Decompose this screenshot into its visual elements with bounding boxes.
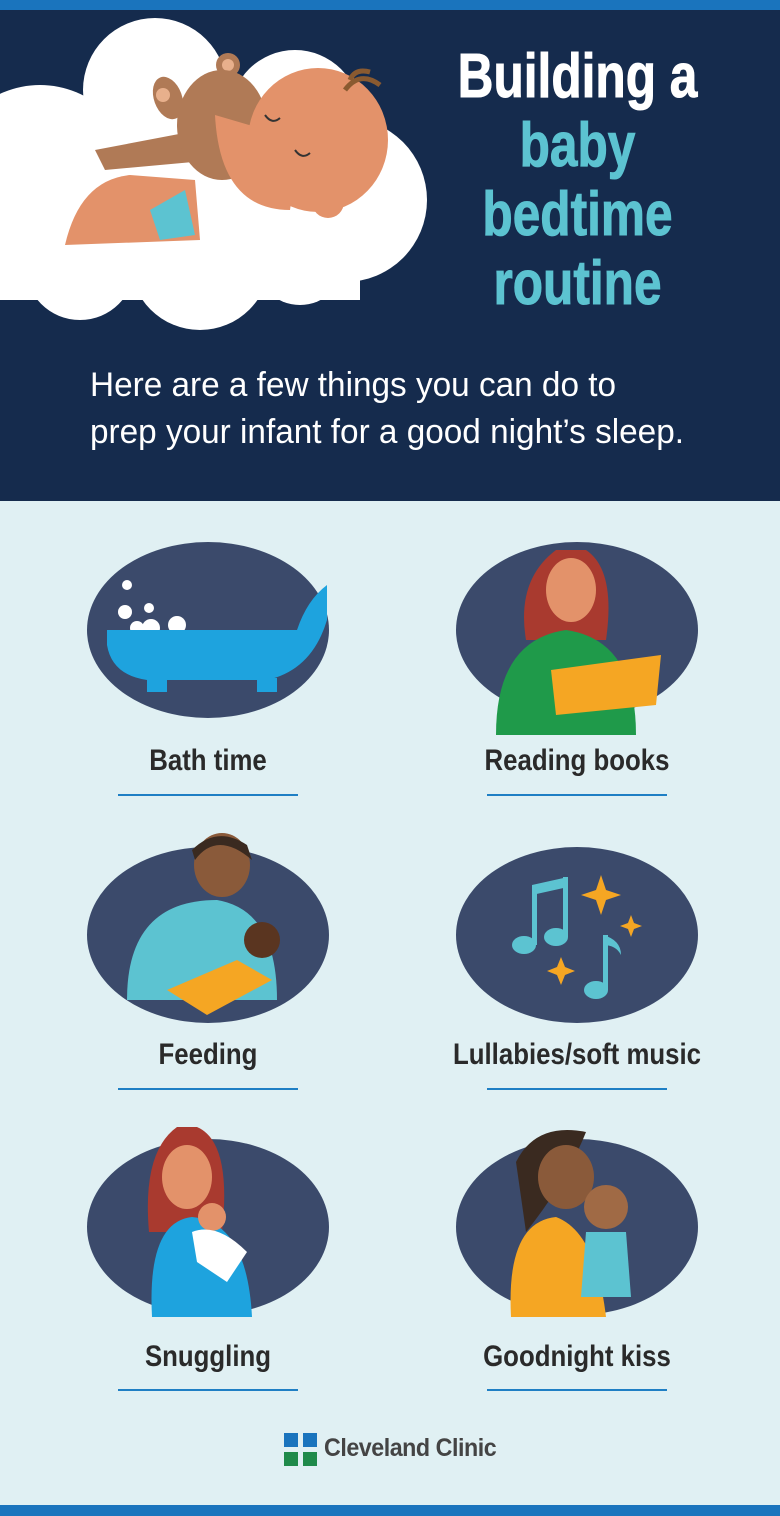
- item: lullabies: [453, 847, 701, 1071]
- icon: woman reading: [456, 542, 698, 735]
- item: goodnight kiss: [456, 1130, 698, 1373]
- icon: music notes: [456, 847, 698, 1023]
- logo: Cleveland Clinic: Cleveland Clinic: [324, 1434, 496, 1462]
- subtitle: Here are a few things you can do to: [90, 366, 616, 404]
- label: Feeding: [159, 1038, 257, 1071]
- item: bath time: [87, 542, 329, 777]
- icon: bathtub: [87, 542, 329, 718]
- title: bedtime: [482, 180, 673, 249]
- label: Bath time: [149, 744, 267, 777]
- icon: mother snuggling baby: [87, 1127, 329, 1317]
- subtitle: prep your infant for a good night’s sleep.: [90, 413, 684, 451]
- item: reading books: [456, 542, 698, 777]
- title: [458, 42, 698, 318]
- title: Building a: [458, 42, 697, 111]
- bottom bar: [0, 1505, 780, 1516]
- item: feeding: [87, 833, 329, 1071]
- subtitle: [90, 366, 684, 451]
- label: Lullabies/soft music: [453, 1038, 701, 1071]
- title: routine: [493, 249, 662, 318]
- top bar: [0, 0, 780, 10]
- icon: father feeding baby: [87, 833, 329, 1023]
- header panel: [0, 10, 780, 501]
- item: snuggling: [87, 1127, 329, 1373]
- logo: Cleveland Clinic: [284, 1433, 496, 1466]
- icon: mother kissing baby: [456, 1130, 698, 1317]
- label: Snuggling: [145, 1340, 271, 1373]
- title: baby: [520, 111, 635, 180]
- label: Goodnight kiss: [483, 1340, 671, 1373]
- illustration: baby on cloud: [0, 18, 427, 330]
- label: Reading books: [485, 744, 669, 777]
